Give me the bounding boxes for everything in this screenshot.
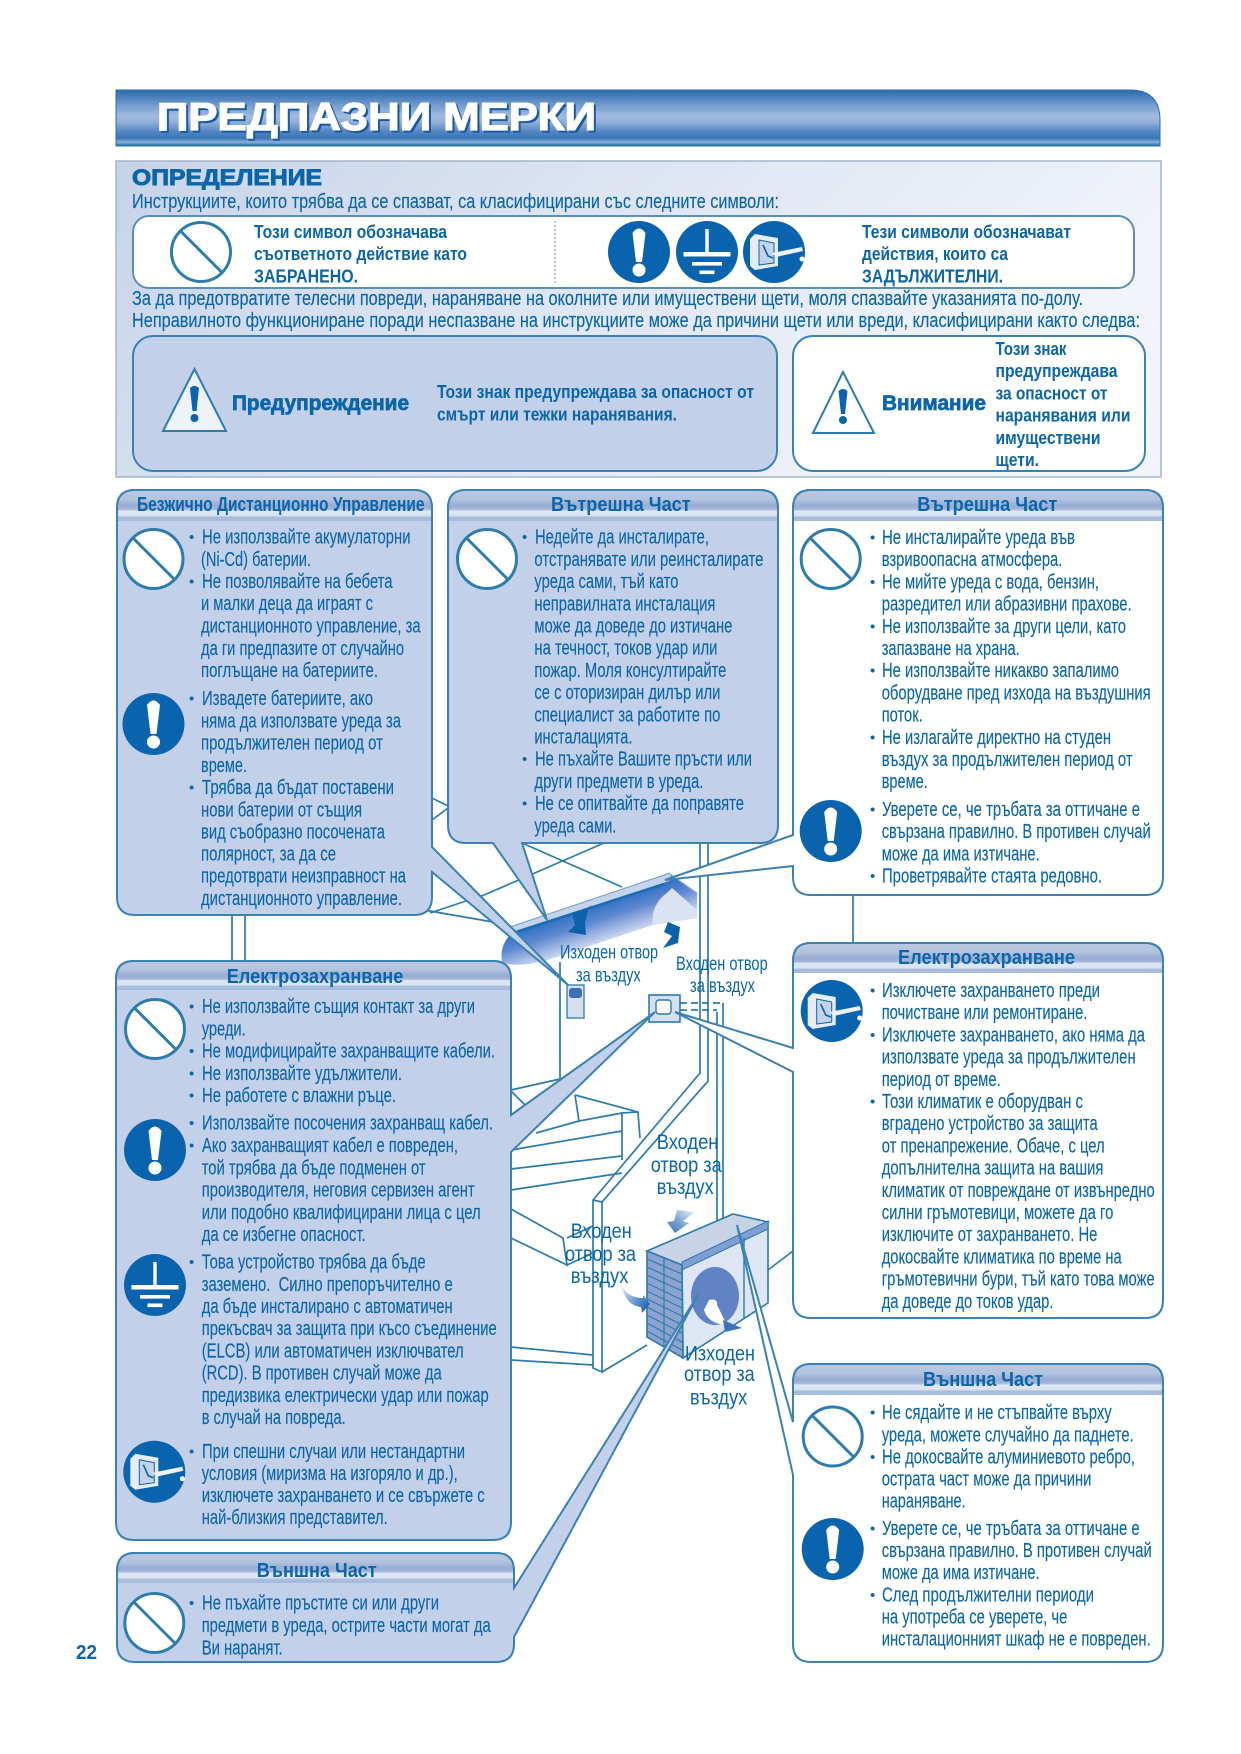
icon: mandatory (608, 221, 670, 283)
text list: изключете захранването и се свържете с (202, 1484, 485, 1507)
icon: warning triangle (163, 369, 226, 431)
text list: • (870, 1520, 875, 1537)
definition background (116, 161, 1161, 477)
text list: Не използвайте никакво запалимо (882, 659, 1119, 682)
warning text: Този знак предупреждава за опасност от (437, 382, 754, 402)
title banner (116, 90, 1160, 146)
label: indoor air inlet (676, 953, 768, 997)
panel shape (117, 490, 568, 985)
text list: Уверете се, че тръбата за оттичане е (882, 798, 1140, 821)
room lines (232, 798, 853, 1372)
symbols box (133, 216, 1134, 288)
label: indoor air outlet (560, 942, 658, 986)
text list: • (189, 1138, 194, 1154)
label: indoor air inlet: за въздух (690, 975, 755, 997)
mandatory text: Тези символи обозначават (862, 222, 1071, 242)
header band (793, 490, 1163, 521)
arrow: top intake (667, 1210, 695, 1233)
text list: да ги предпазите от случайно (201, 637, 404, 660)
text list: да доведе до токов удар. (882, 1290, 1053, 1313)
text list: Не използвайте същия контакт за други (202, 995, 475, 1018)
arrow: side intake (621, 1285, 650, 1313)
outdoor unit (621, 1210, 768, 1358)
text list: (ELCB) или автоматичен изключвател (202, 1340, 464, 1363)
caution text: за опасност от (996, 384, 1108, 404)
text list: въздух за продължителен период от (882, 748, 1133, 771)
label: outdoor air outlet: въздух (690, 1386, 748, 1410)
heading: Външна Част (923, 1368, 1043, 1391)
caution text: наранявания или (996, 406, 1130, 426)
text list: изключите от захранването. Не (882, 1223, 1097, 1246)
header band (793, 943, 1163, 973)
text list: Изключете захранването преди (882, 979, 1100, 1002)
text list: разредител или абразивни прахове. (882, 593, 1132, 616)
label: indoor air outlet: Изходен отвор (560, 942, 658, 964)
panel shape (665, 490, 1163, 895)
text list: Не използвайте за други цели, като (882, 615, 1126, 638)
text list: • (870, 1027, 875, 1044)
text list: Изключете захранването, ако няма да (882, 1023, 1145, 1046)
icon: earth (124, 1254, 186, 1316)
text list: от пренапрежение. Обаче, с цел (882, 1134, 1105, 1157)
prohibited text: ЗАБРАНЕНО. (254, 266, 358, 286)
panel: indoor unit centre (448, 490, 778, 920)
text list: специалист за работите по (534, 703, 720, 726)
panel: definition (116, 161, 1161, 477)
caution text (996, 339, 1130, 470)
text list (522, 526, 763, 837)
warning box (133, 336, 777, 471)
text list: Недейте да инсталирате, (535, 526, 709, 549)
text list: острата част може да причини (882, 1468, 1091, 1490)
label: outdoor air inlet side: Входен (571, 1219, 632, 1243)
text list: предизвика електрически удар или пожар (202, 1384, 489, 1407)
icon: prohibited (124, 530, 183, 588)
text list: уреда сами. (534, 814, 616, 837)
warning text (437, 382, 754, 424)
icon: switch off (743, 221, 805, 283)
text list: допълнителна защита на вашия (882, 1157, 1103, 1180)
caution text: предупреждава (996, 361, 1118, 381)
title text: ПРЕДПАЗНИ МЕРКИ (157, 96, 596, 139)
label: outdoor air inlet top: отвор за (651, 1153, 722, 1177)
text list: поглъщане на батериите. (201, 659, 378, 682)
text list: След продължителни периоди (882, 1584, 1094, 1606)
header band (116, 961, 511, 990)
text list: • (189, 1595, 194, 1612)
text list: Не пъхайте Вашите пръсти или (535, 748, 752, 771)
text list: • (870, 868, 875, 885)
text list: полярност, за да се (201, 842, 336, 866)
text list: може да доведе до изтичане (534, 614, 732, 638)
caution label: Внимание (882, 392, 986, 415)
heading: Външна Част (257, 1559, 377, 1582)
text list: заземено. Силно препоръчително е (202, 1273, 453, 1296)
text list: Не мийте уреда с вода, бензин, (882, 570, 1099, 593)
text list: • (870, 982, 875, 1000)
icon: prohibited (125, 1594, 184, 1652)
prohibited text: съответното действие като (254, 244, 467, 264)
heading: Вътрешна Част (917, 493, 1057, 516)
text list: Не използвайте удължители. (202, 1062, 402, 1085)
text list: (RCD). В противен случай може да (202, 1362, 442, 1385)
text list: Не докосвайте алуминиевото ребро, (882, 1446, 1135, 1468)
text list: той трябва да бъде подменен от (202, 1156, 426, 1180)
panel shape (448, 490, 778, 920)
text list: Ви наранят. (202, 1636, 283, 1659)
label: outdoor air outlet: Изходен (685, 1342, 755, 1366)
text list: няма да използвате уреда за (201, 710, 401, 733)
text list: продължителен период от (201, 732, 383, 755)
text list: прекъсвач за защита при късо съединение (202, 1317, 497, 1340)
text list: в случай на повреда. (202, 1406, 346, 1429)
text list: Не излагайте директно на студен (882, 726, 1111, 749)
panel shape (675, 943, 1163, 1318)
text list (870, 526, 1151, 888)
heading: Безжично Дистанционно Управление (137, 493, 424, 516)
heading: Вътрешна Част (551, 493, 691, 516)
label: outdoor air inlet top: въздух (657, 1175, 714, 1199)
panel: indoor unit right (665, 490, 1163, 895)
indoor unit (501, 873, 697, 965)
text list: или подобно квалифицирани лица с цел (202, 1201, 481, 1224)
label: indoor air outlet: за въздух (576, 964, 641, 986)
text list: • (189, 1043, 194, 1060)
heading: Електрозахранване (227, 965, 403, 988)
text list: • (870, 1405, 875, 1422)
text list: • (189, 1444, 194, 1460)
icon: mandatory (124, 1119, 186, 1181)
text list: други предмети в уреда. (534, 770, 703, 793)
arrow: air in (663, 922, 680, 948)
text list: дистанционното управление, за (201, 615, 421, 638)
definition heading: ОПРЕДЕЛЕНИЕ (132, 165, 322, 190)
icon: prohibited (458, 530, 516, 588)
text list: се с оторизиран дилър или (534, 681, 720, 704)
text list: предмети в уреда, острите части могат да (202, 1614, 491, 1637)
fan (691, 1267, 742, 1332)
text list: • (870, 1587, 875, 1604)
text list: • (870, 618, 875, 635)
text list: инсталацията. (534, 726, 632, 748)
text list: уреди. (202, 1018, 246, 1041)
label: indoor air inlet: Входен отвор (676, 953, 768, 975)
text list: отстранявате или реинсталирате (534, 548, 763, 571)
icon: earth (676, 221, 738, 283)
text list: Извадете батериите, ако (202, 687, 373, 710)
label: outdoor air outlet: отвор за (684, 1362, 755, 1386)
prohibited text (254, 222, 467, 286)
header band (793, 1364, 1163, 1395)
text list: и малки деца да играят с (201, 592, 373, 615)
prohibited text: Този символ обозначава (254, 222, 448, 242)
label: outdoor air inlet top: Входен (657, 1130, 718, 1154)
text list: Трябва да бъдат поставени (202, 776, 394, 799)
text list: Това устройство трябва да бъде (202, 1251, 426, 1274)
caution text: щети. (996, 450, 1039, 470)
text list: период от време. (882, 1068, 1001, 1091)
panel: outdoor unit left (117, 1295, 698, 1662)
text list: • (870, 1449, 875, 1466)
text list: да бъде инсталирано с автоматичен (202, 1295, 453, 1318)
panel shape (737, 1225, 1163, 1662)
text list: дистанционното управление. (201, 887, 402, 910)
illustration: room with air conditioner (232, 798, 853, 1372)
text list: • (189, 1115, 194, 1132)
icon: mandatory (800, 800, 862, 862)
text list: (Ni-Cd) батерии. (201, 548, 311, 571)
warning label: Предупреждение (232, 392, 409, 415)
caution box (793, 336, 1145, 471)
remote control (567, 985, 584, 1018)
text list (189, 995, 497, 1529)
icon: caution triangle (813, 372, 874, 433)
text list: Не модифицирайте захранващите кабели. (202, 1040, 495, 1063)
text list (870, 979, 1155, 1313)
text list: нараняване. (882, 1490, 966, 1512)
text list (189, 1592, 491, 1659)
text list: вградено устройство за защита (882, 1112, 1098, 1135)
text list: нови батерии от същия (201, 798, 362, 821)
mandatory text: действия, които са (862, 244, 1009, 264)
icon: mandatory (122, 693, 184, 755)
panel shape (116, 961, 655, 1540)
text list: почистване или ремонтиране. (882, 1001, 1087, 1024)
icon: mandatory (802, 1518, 864, 1580)
text list: уреда сами, тъй като (534, 570, 678, 593)
text list: предотврати неизправност на (201, 865, 406, 888)
definition explanation (132, 287, 1140, 332)
text list (189, 526, 421, 910)
text list: запазване на храна. (882, 637, 1020, 660)
text list: Този климатик е оборудван с (882, 1090, 1083, 1113)
warning text: смърт или тежки наранявания. (437, 404, 677, 424)
text list: да се избегне опасност. (202, 1223, 366, 1246)
text list: • (189, 690, 194, 708)
text list: пожар. Моля консултирайте (534, 659, 726, 682)
text list: взривоопасна атмосфера. (882, 548, 1062, 571)
caution text: имуществени (996, 428, 1100, 448)
panel: wireless remote (117, 490, 568, 985)
icon: prohibited (803, 1407, 862, 1466)
text list: Уверете се, че тръбата за оттичане е (882, 1517, 1140, 1540)
label: outdoor air inlet side: отвор за (565, 1242, 636, 1266)
label: outdoor air inlet side (565, 1219, 636, 1288)
diagram labels (560, 942, 768, 1410)
text list: Проветрявайте стаята редовно. (882, 865, 1102, 888)
arrow: air out (568, 905, 592, 935)
mandatory text: ЗАДЪЛЖИТЕЛНИ. (862, 266, 1003, 286)
text list: поток. (882, 704, 923, 727)
icon: prohibited (126, 1000, 184, 1058)
unit top (647, 1214, 768, 1265)
text list: Не сядайте и не стъпвайте върху (882, 1401, 1112, 1424)
label: outdoor air inlet side: въздух (571, 1264, 629, 1288)
text list: Не използвайте акумулаторни (202, 526, 410, 549)
text list: производителя, неговия сервизен агент (202, 1178, 475, 1202)
icon: prohibited (172, 222, 230, 282)
text list: • (870, 529, 875, 546)
text list: използвате уреда за продължителен (882, 1046, 1136, 1069)
text list: Използвайте посочения захранващ кабел. (202, 1112, 493, 1135)
text list: • (870, 1094, 875, 1110)
banner bar (116, 90, 1160, 146)
definition intro: Инструкциите, които трябва да се спазват, са класифицирани със следните символи: (132, 190, 779, 213)
text list: Не пъхайте пръстите си или други (202, 1592, 439, 1615)
text list: Не се опитвайте да поправяте (535, 792, 744, 815)
text list: • (189, 998, 194, 1016)
header band (117, 490, 432, 521)
text list (870, 1401, 1152, 1650)
text list: • (870, 802, 875, 819)
wall outlet and pipes (649, 995, 723, 1022)
text list: • (870, 574, 875, 591)
mandatory text (862, 222, 1071, 286)
text list: • (870, 729, 875, 746)
text list: • (189, 529, 194, 546)
text list: • (189, 574, 194, 590)
page number: 22 (76, 1642, 97, 1664)
text list: • (189, 1254, 194, 1271)
text list: • (189, 780, 194, 796)
header band (117, 1553, 514, 1583)
text list: Не инсталирайте уреда във (882, 526, 1075, 549)
text list: • (522, 529, 527, 546)
text list: При спешни случаи или нестандартни (202, 1440, 465, 1463)
heading: Електрозахранване (898, 946, 1075, 969)
text list: неправилната инсталация (534, 592, 715, 615)
text list: време. (882, 770, 928, 793)
text list: • (870, 663, 875, 680)
text list: на употреба се уверете, че (882, 1606, 1067, 1628)
caution text: Този знак (996, 339, 1067, 359)
label: outdoor air inlet top (651, 1130, 722, 1199)
label: outdoor air outlet (684, 1342, 755, 1410)
icon: switch off (801, 980, 863, 1042)
text list: • (522, 796, 527, 813)
text list: Не работете с влажни ръце. (202, 1084, 396, 1107)
text list: • (189, 1088, 194, 1104)
text list: може да има изтичане. (882, 1561, 1040, 1584)
text list: време. (201, 754, 247, 777)
unit fins (647, 1251, 683, 1358)
icon: prohibited (801, 530, 860, 588)
unit front (682, 1222, 768, 1358)
panel: power supply right (675, 943, 1163, 1318)
text list: докосвайте климатика по време на (882, 1245, 1122, 1268)
text list: уреда, можете случайно да паднете. (882, 1424, 1134, 1446)
text list: може да има изтичане. (882, 842, 1040, 865)
text list: Не позволявайте на бебета (202, 570, 393, 593)
text list: силни гръмотевици, можете да го (882, 1201, 1113, 1224)
panel shape (117, 1295, 698, 1662)
text list: на течност, токов удар или (534, 637, 717, 660)
panel: power supply left (116, 961, 655, 1540)
header band (448, 490, 778, 521)
text list: • (522, 751, 527, 768)
panel: outdoor unit right (737, 1225, 1163, 1662)
text list: вид съобразно посочената (201, 820, 385, 843)
text list: Ако захранващият кабел е повреден, (202, 1134, 458, 1157)
text list: най-близкия представител. (202, 1506, 388, 1529)
text list: условия (миризма на изгоряло и др.), (202, 1462, 458, 1485)
icon: switch off (123, 1441, 185, 1503)
text list: • (189, 1066, 194, 1082)
